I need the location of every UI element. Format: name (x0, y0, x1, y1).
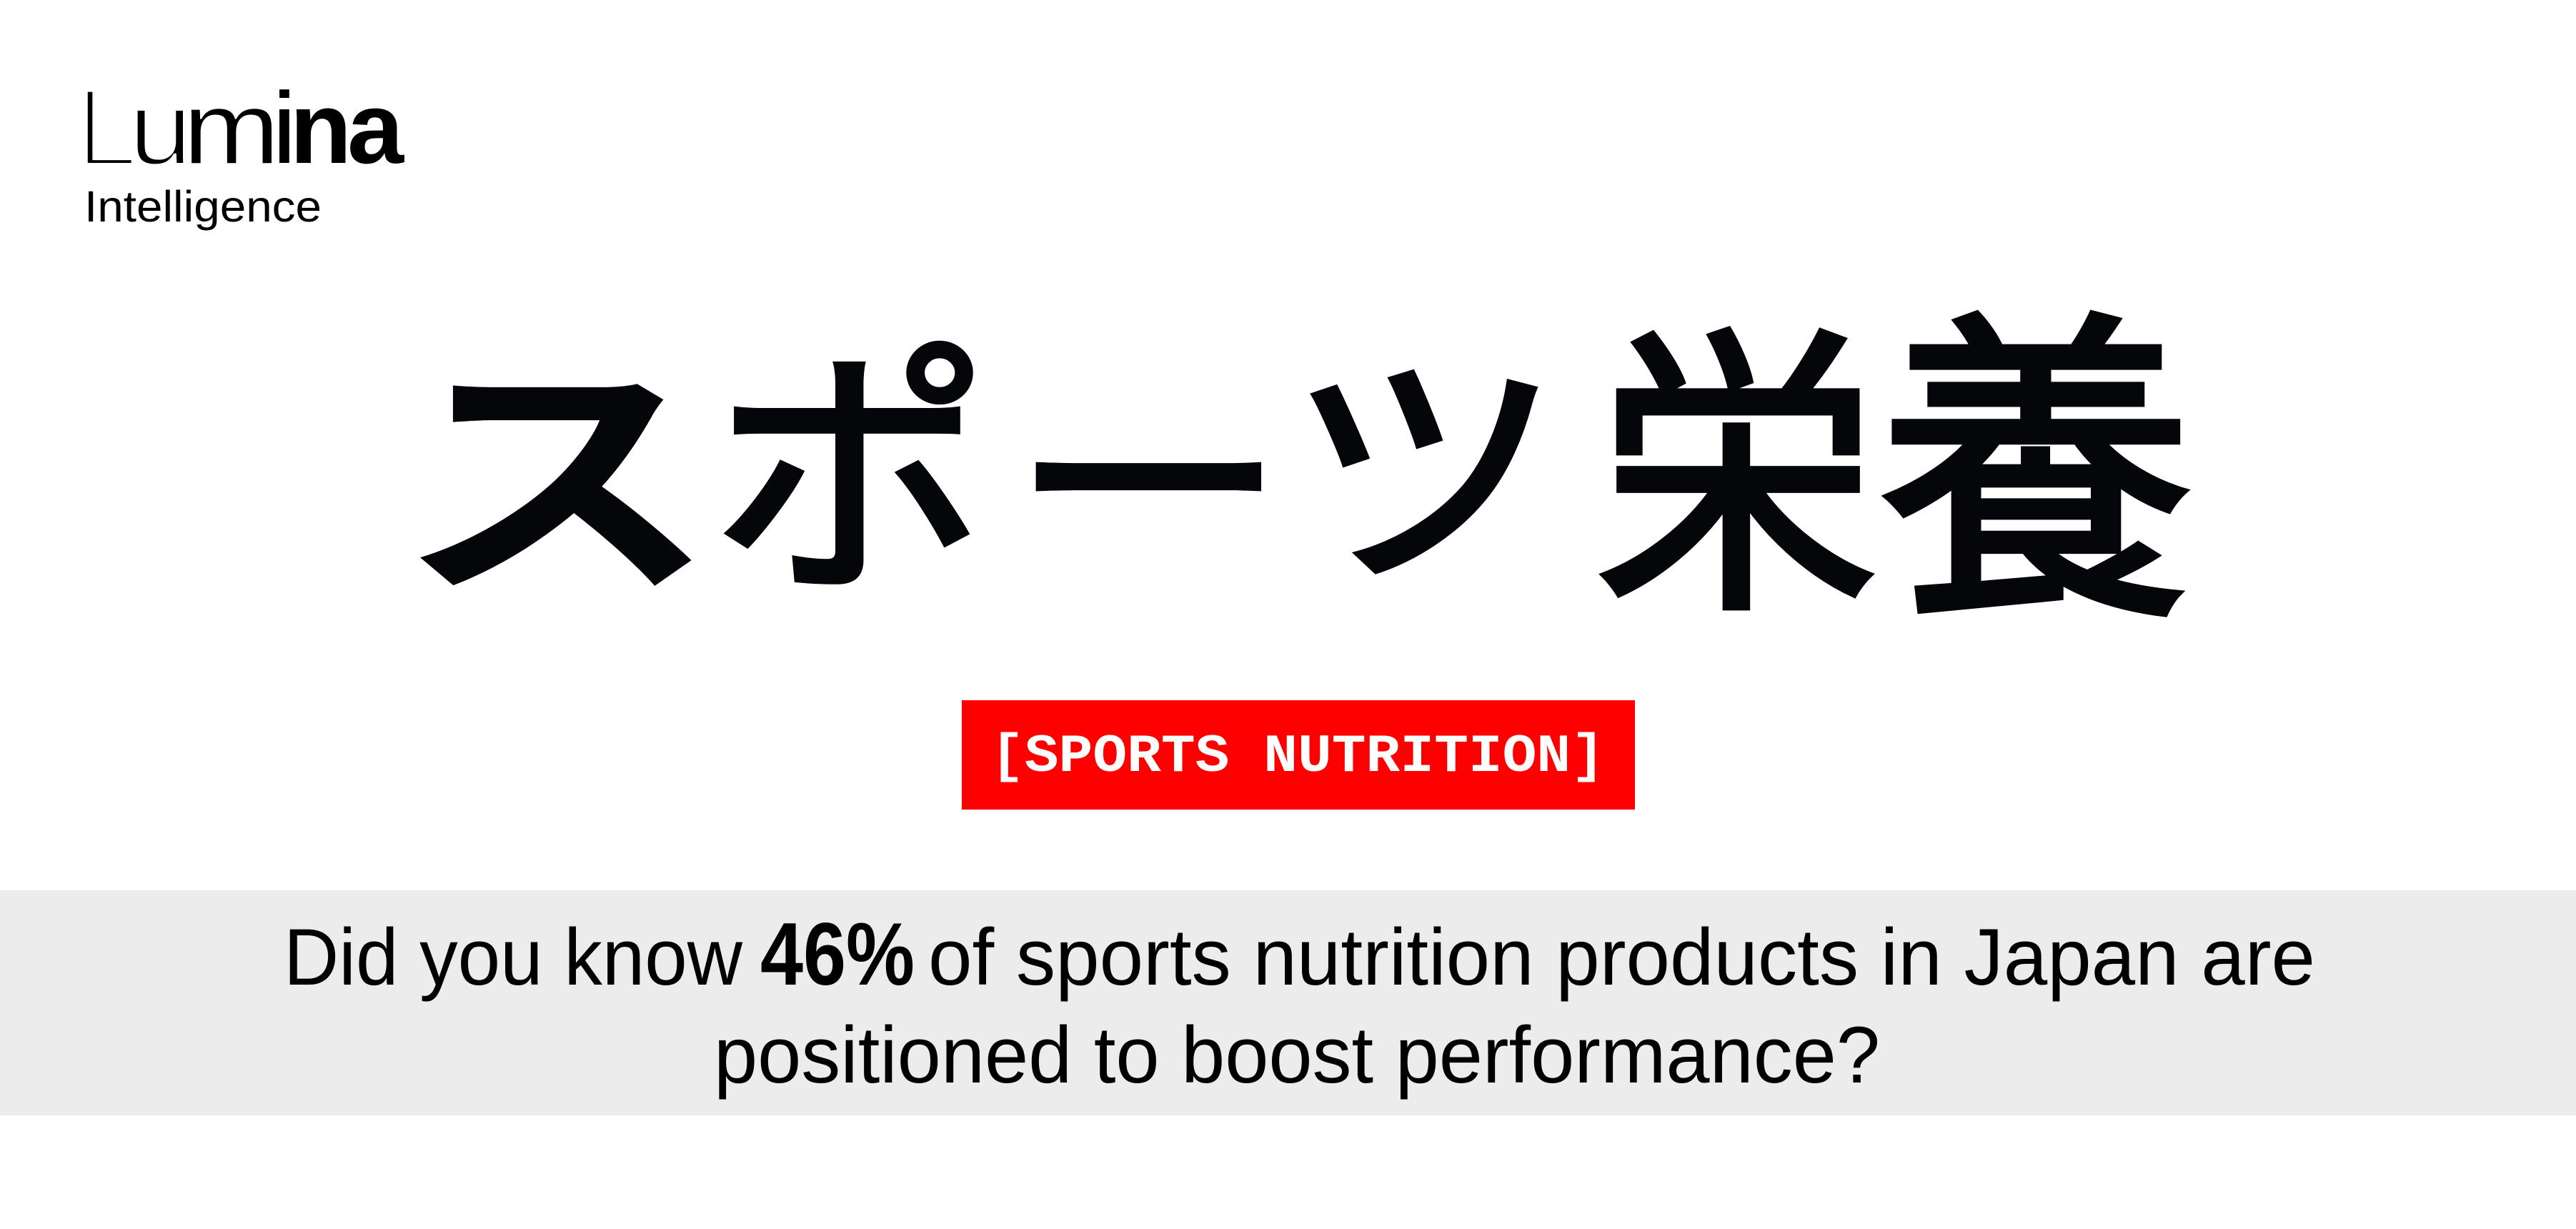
title: Japanese sports nutrition (396, 294, 2195, 657)
logo subtitle: Intelligence: Intelligence (84, 182, 322, 231)
logo: Lumina Intelligence (76, 66, 404, 231)
highlighted statistic: 46% (760, 905, 915, 1004)
logo wordmark: Lumina: u (129, 70, 192, 186)
fact banner (0, 890, 2576, 1115)
title: Japanese sports nutrition: ス (396, 342, 717, 630)
fact text line 2: positioned to boost performance? (714, 1010, 1880, 1100)
fact text line 1: Did you know (284, 912, 743, 1002)
fact text line 1 (284, 905, 2315, 1004)
red label: sports nutrition (962, 700, 1635, 810)
logo wordmark: Lumina: L (76, 66, 138, 190)
title: Japanese sports nutrition: ツ (1287, 334, 1562, 617)
logo wordmark: Lumina: m (183, 71, 280, 186)
logo wordmark: Lumina (76, 66, 404, 190)
logo wordmark: Lumina: i (272, 71, 297, 184)
title: Japanese sports nutrition: 栄 (1595, 309, 1879, 647)
title: Japanese sports nutrition: ポ (711, 329, 990, 627)
logo wordmark: Lumina: a (347, 71, 404, 185)
red label: sports nutrition: [SPORTS NUTRITION] (990, 727, 1605, 787)
title: Japanese sports nutrition: 養 (1877, 294, 2195, 657)
title: Japanese sports nutrition: ー (1010, 380, 1287, 587)
fact text line 1: of sports nutrition products in Japan are (928, 912, 2315, 1002)
logo wordmark: Lumina: n (290, 71, 352, 185)
